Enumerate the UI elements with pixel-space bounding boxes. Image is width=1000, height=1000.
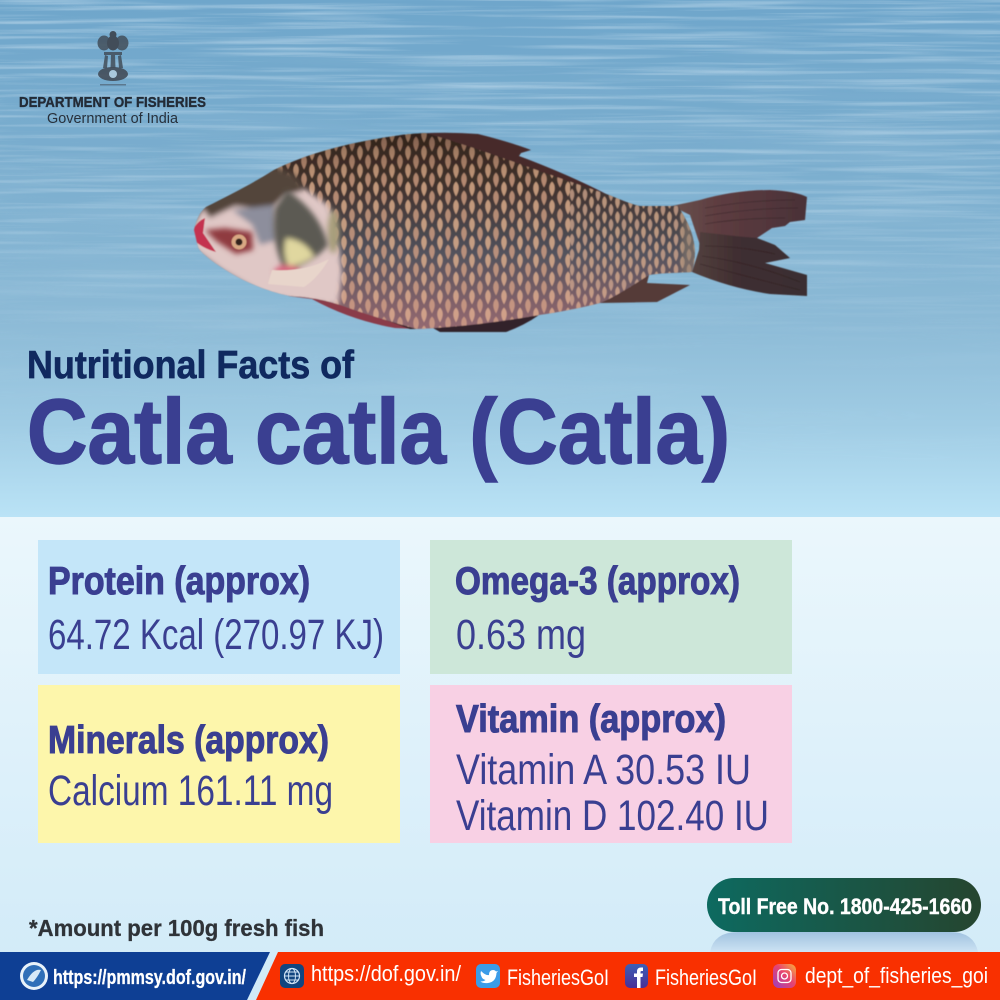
footnote: *Amount per 100g fresh fish: [29, 915, 324, 941]
heading: Nutritional Facts of: [27, 344, 355, 387]
icon: twitter: [476, 964, 500, 988]
panel: vitamin: [430, 685, 792, 843]
minerals value: Calcium 161.11 mg: [48, 767, 333, 815]
lower background panel: [0, 517, 1000, 1000]
protein value: 64.72 Kcal (270.97 KJ): [48, 611, 384, 659]
body with scales: [190, 130, 710, 335]
footer: pmmsy link: [0, 952, 270, 1000]
toll free number: Toll Free No. 1800-425-1660: [718, 894, 972, 919]
operculum edge: [268, 259, 329, 287]
tail fin upper lobe: [672, 190, 807, 245]
pectoral fin: [288, 295, 417, 329]
vitamin heading: Vitamin (approx): [456, 698, 726, 741]
pmmsy url: https://pmmsy.dof.gov.in/: [53, 967, 246, 989]
vitamin A value: Vitamin A 30.53 IU: [456, 746, 751, 794]
toll free pill: [707, 878, 981, 952]
vitamin D value: Vitamin D 102.40 IU: [456, 792, 769, 840]
icon: pmmsy logo: [20, 962, 48, 990]
icon: facebook: [625, 964, 648, 988]
footer bar: [0, 952, 1000, 1000]
tail fin rays: [700, 200, 800, 290]
panel: minerals: [38, 685, 400, 843]
government of india: Government of India: [47, 111, 179, 127]
ventral fin: [433, 315, 539, 332]
anal fin: [600, 275, 690, 303]
heading: [27, 344, 730, 483]
department name: DEPARTMENT OF FISHERIES: [19, 95, 206, 111]
footer: social links: [256, 952, 1000, 1000]
protein heading: Protein (approx): [48, 560, 310, 603]
eye patch: [205, 228, 253, 254]
omega-3 heading: Omega-3 (approx): [455, 560, 740, 603]
water background: [0, 0, 1000, 517]
twitter handle: FisheriesGoI: [507, 965, 609, 990]
facebook handle: FisheriesGoI: [655, 965, 757, 990]
fish illustration: [190, 130, 807, 335]
gill cover: [274, 190, 328, 279]
omega-3 value: 0.63 mg: [456, 611, 586, 659]
minerals heading: Minerals (approx): [48, 719, 329, 762]
head: [190, 166, 342, 305]
icon: national emblem: [98, 31, 128, 86]
logo: Department of Fisheries: [19, 31, 206, 127]
panel: omega-3: [430, 540, 792, 674]
eye: [232, 234, 246, 250]
tail joint: [680, 211, 695, 272]
icon: instagram: [773, 964, 796, 988]
icon: globe: [280, 964, 304, 988]
website url: https://dof.gov.in/: [311, 961, 462, 986]
main title: Catla catla (Catla): [27, 381, 730, 483]
dorsal fin: [400, 133, 640, 207]
tail fin lower lobe: [692, 232, 807, 296]
panel: protein: [38, 540, 400, 674]
mouth: [192, 218, 216, 252]
